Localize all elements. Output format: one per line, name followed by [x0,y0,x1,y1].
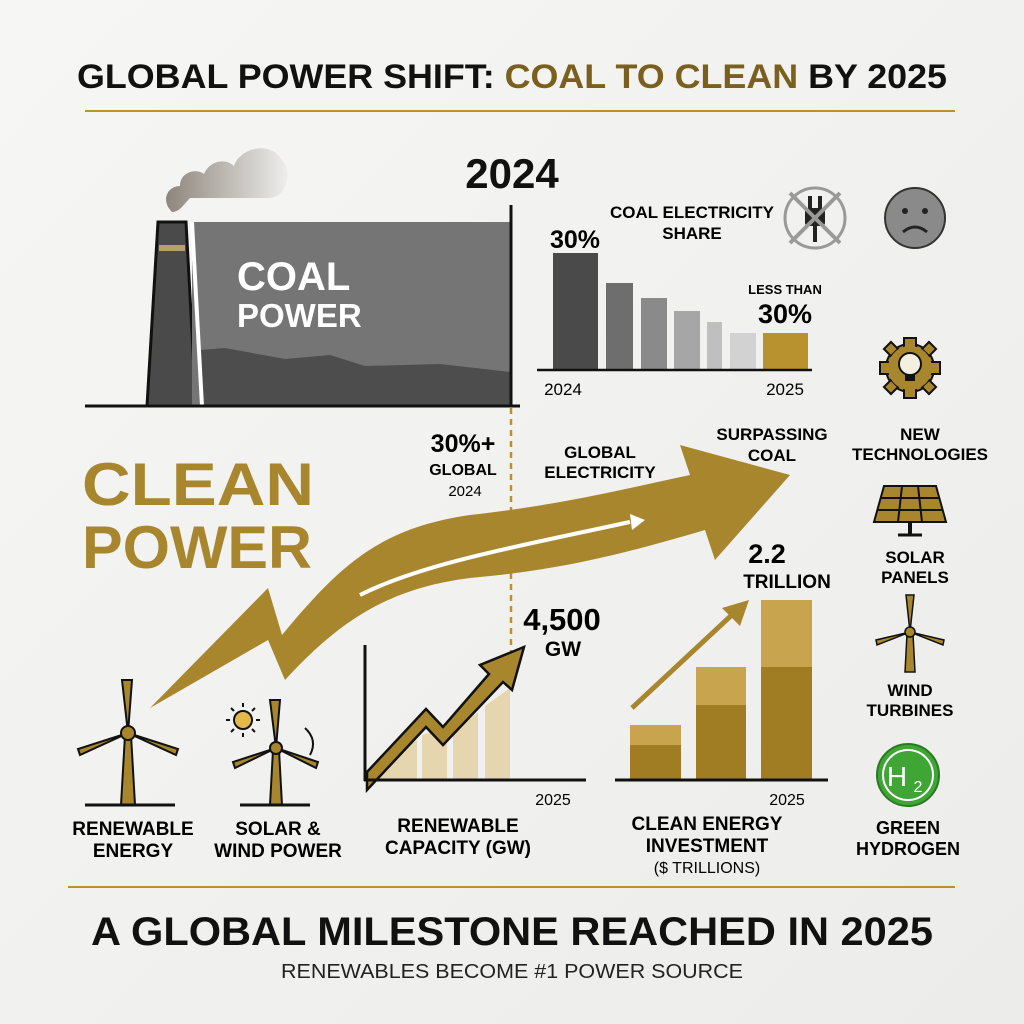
text: coal power: COAL [237,255,350,299]
text: 30%+ global 2024: 30%+ [431,430,495,458]
chart: clean energy investment [615,539,831,809]
title: GLOBAL POWER SHIFT: COAL TO CLEAN BY 2025 [77,58,947,96]
bar chart: coal electricity share: 2025 [766,380,804,399]
bar chart: coal electricity share: LESS THAN [748,282,822,297]
text: clean energy investment: INVESTMENT [646,836,769,857]
text: renewable capacity [385,816,531,859]
text: green hydrogen: HYDROGEN [856,839,960,859]
chart: renewable capacity [364,602,601,809]
text: coal electricity share: COAL ELECTRICITY [610,203,775,222]
text: global electricity [544,443,656,482]
icon: wind turbine [876,595,944,672]
text: clean energy investment: ($ TRILLIONS) [654,860,760,877]
text: green hydrogen [856,818,960,859]
heading: clean power: POWER [82,514,312,581]
footer heading: A GLOBAL MILESTONE REACHED IN 2025 [91,910,933,954]
chart: clean energy investment: TRILLION [743,572,831,593]
text: 30%+ global 2024 [429,430,497,500]
text: new technologies: NEW [900,425,941,444]
text: solar & wind power: WIND POWER [214,841,342,862]
icon: hydrogen: 2 [914,779,923,796]
text: wind turbines [867,681,953,720]
text: clean energy investment: CLEAN ENERGY [632,814,783,835]
bar chart: coal electricity share: 2024 [544,380,582,399]
chart: clean energy investment: 2.2 [748,539,786,569]
heading: 2024: 2024 [465,150,559,197]
icon: sad face [885,188,945,248]
heading: clean power: CLEAN [82,451,314,518]
chart: renewable capacity: GW [545,638,581,661]
panel: coal power: POWER [237,297,362,334]
text: surpassing coal [716,425,828,465]
text: coal electricity share [610,203,775,243]
text: solar & wind power: SOLAR & [235,819,321,840]
icon: crossed plug [785,188,845,248]
text: surpassing coal: SURPASSING [716,425,828,444]
text: global electricity: ELECTRICITY [544,463,656,482]
text: wind turbines: WIND [887,681,933,700]
text: renewable energy: ENERGY [93,841,173,862]
text: solar panels [881,548,949,587]
arrow: big clean power arrow [150,445,790,708]
text: renewable energy: RENEWABLE [72,819,194,840]
text: clean energy investment [632,814,783,877]
footer subtitle: RENEWABLES BECOME #1 POWER SOURCE [281,961,743,983]
chart: clean energy investment: 2025 [769,792,805,809]
text: global electricity: GLOBAL [564,443,636,462]
text: surpassing coal: COAL [748,446,796,465]
icon: wind turbine renewable energy [78,680,178,805]
chart: renewable capacity: 4,500 [523,602,601,637]
text: renewable energy [72,819,194,862]
text: 30%+ global 2024: 2024 [448,483,482,500]
icon: gear bulb [880,338,940,398]
text: green hydrogen: GREEN [876,818,940,838]
heading: clean power [82,451,314,581]
text: renewable capacity: RENEWABLE [397,816,519,837]
icon: solar panel [874,486,946,535]
bar chart: coal electricity share: 30% [758,299,812,329]
text: solar & wind power [214,819,342,862]
text: 30%+ global 2024: GLOBAL [429,462,497,479]
text: renewable capacity: CAPACITY (GW) [385,838,531,859]
text: solar panels: PANELS [881,568,949,587]
chart: renewable capacity: 2025 [535,792,571,809]
text: wind turbines: TURBINES [867,701,953,720]
icon: solar & wind [226,700,318,805]
icon: hydrogen: H [887,761,907,792]
icon: smoke [166,148,287,212]
text: coal electricity share: SHARE [662,224,722,243]
bar chart: coal electricity share: 30% [550,226,600,254]
bar chart: coal electricity share [537,226,822,399]
text: new technologies [852,425,988,464]
text: solar panels: SOLAR [885,548,945,567]
icon: chimney [147,222,196,406]
icon: hydrogen [877,744,939,806]
panel: coal power [85,148,520,406]
text: new technologies: TECHNOLOGIES [852,445,988,464]
